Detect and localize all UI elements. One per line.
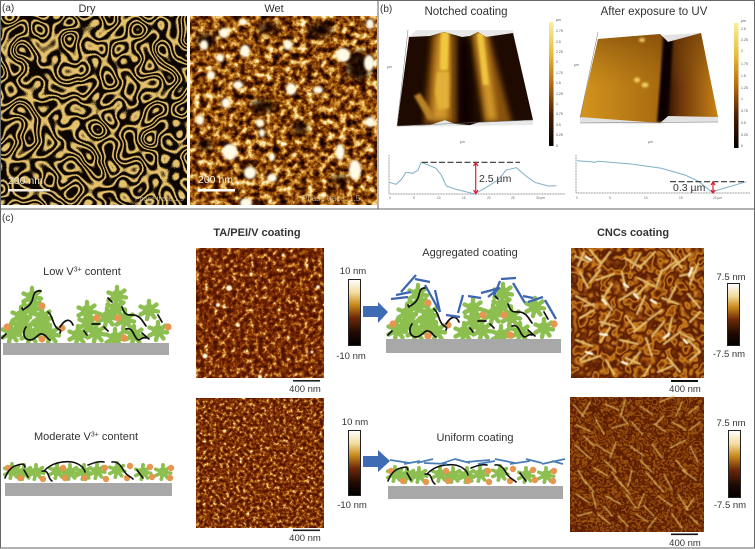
color bar: notched map: 2 — [556, 60, 558, 64]
label: Low V3+ content: Low V — [43, 266, 74, 278]
schematic: uniform coating — [388, 432, 565, 499]
label: Moderate V3+ content: 3+ — [91, 432, 99, 438]
3D AFM map: notched coating — [387, 30, 533, 144]
color bar: UV map: 1 — [741, 97, 743, 101]
color bar: UV map: 0 — [741, 144, 743, 148]
substrate — [388, 486, 563, 499]
profile chart: notched coating: 0 — [389, 196, 391, 200]
heading: Notched coating: Notched coating — [424, 6, 508, 18]
color bar: notched map: 1.5 — [556, 81, 561, 85]
wet scale bar — [198, 176, 235, 192]
color bar: notched map: µm — [556, 18, 561, 22]
scale bar: 400 nm — [669, 384, 701, 395]
scale bar: 400 nm — [669, 538, 701, 549]
profile chart: after UV: 15 — [679, 196, 683, 200]
label: Moderate V3+ content: Moderate V — [34, 431, 91, 443]
color bar: TA/PEI/V top: 10 nm — [340, 266, 366, 277]
profile chart: notched coating — [389, 155, 565, 200]
color bar: UV map — [734, 19, 748, 148]
color bar: CNC top — [713, 272, 746, 360]
color bar: notched map: 2.5 — [556, 40, 561, 44]
AFM image: TA/PEI/V moderate — [196, 398, 324, 544]
panel label (c): (c) — [2, 213, 14, 224]
wet dark patches — [196, 23, 370, 184]
panel: (b) notched coating and UV healed coating — [380, 4, 750, 200]
profile chart: after UV — [576, 155, 750, 200]
color bar: CNC top: -7.5 nm — [713, 349, 745, 360]
color bar: UV map: 2.25 — [741, 38, 748, 42]
color bar: UV map: 1.25 — [741, 86, 748, 90]
color bar: notched map: 1.25 — [556, 92, 563, 96]
color bar: notched map: 0.75 — [556, 112, 563, 116]
AFM image: CNC bottom — [570, 396, 704, 549]
panel label (a): (a) — [2, 3, 14, 14]
substrate — [5, 483, 172, 496]
color bar: UV map: 2 — [741, 49, 743, 53]
schematic: low V3+ content — [2, 266, 172, 355]
heading: TA/PEI/V coating: TA/PEI/V coating — [213, 227, 301, 239]
profile chart: notched coating: 20 — [487, 196, 491, 200]
profile chart: after UV: 0 — [576, 196, 578, 200]
color bar: TA/PEI/V bottom: 10 nm — [342, 417, 368, 428]
label 0.3 µm: 0.3 µm — [673, 182, 706, 194]
arrow: moderate to uniform — [363, 450, 390, 472]
arrow: low to aggregated — [363, 302, 388, 323]
color bar: CNC bottom — [714, 418, 746, 511]
3D AFM map: after UV — [574, 32, 718, 144]
3D AFM map: after UV: µm — [574, 63, 579, 67]
dry phase trace note: Phase trace 1.5 — [135, 196, 184, 203]
heading: After exposure to UV: After exposure to UV — [601, 6, 708, 18]
image: wet AFM phase with bright particles — [190, 16, 377, 208]
profile chart: after UV: 20 µm — [713, 196, 722, 200]
label: Aggregated coating: Aggregated coating — [422, 247, 518, 259]
color bar: notched map: 1 — [556, 102, 558, 106]
profile chart: notched coating: 15 — [462, 196, 466, 200]
CNC rods piled on aggregates — [391, 275, 556, 319]
profile chart: after UV: 5 — [609, 196, 611, 200]
color bar: UV map: µm — [741, 19, 746, 23]
substrate — [3, 343, 169, 355]
color bar: notched map: 0.5 — [556, 123, 561, 127]
color bar: UV map: 0.5 — [741, 121, 746, 125]
red double arrow 0.3 µm — [711, 182, 715, 193]
color bar: notched map: 2.75 — [556, 29, 563, 33]
heading: Wet: Wet — [264, 3, 284, 15]
color bar: notched map: 0 — [556, 144, 558, 148]
color bar: notched map: 2.25 — [556, 50, 563, 54]
label: Low V3+ content: content — [82, 266, 121, 278]
AFM image: TA/PEI/V low — [196, 248, 324, 395]
schematic: aggregated coating — [386, 247, 561, 353]
color bar: CNC top: 7.5 nm — [716, 272, 746, 283]
color bar: TA/PEI/V top — [336, 266, 366, 362]
label: Moderate V3+ content: content — [99, 431, 138, 443]
schematic: moderate V3+ content — [5, 431, 174, 496]
color bar: TA/PEI/V top: -10 nm — [336, 351, 366, 362]
heading: Dry: Dry — [78, 3, 96, 15]
profile chart: after UV: 10 — [644, 196, 648, 200]
panel: (a) dry and wet phase images — [1, 3, 377, 208]
profile chart: notched coating: 5 — [413, 196, 415, 200]
label: Low V3+ content: 3+ — [74, 266, 82, 274]
profile chart: notched coating: 25 — [511, 196, 515, 200]
panel label (b): (b) — [380, 4, 392, 15]
dry scale bar — [8, 175, 50, 192]
wet phase trace note: Phase trace: 1.5 — [302, 194, 361, 203]
color bar: notched map: 0.25 — [556, 133, 563, 137]
color bar: UV map: 1.75 — [741, 62, 748, 66]
image: dry labyrinth AFM phase — [1, 16, 187, 205]
3D AFM map: notched coating: µm — [460, 140, 465, 144]
color bar: UV map: 2.5 — [741, 27, 746, 31]
map 2 bright spots — [634, 38, 648, 88]
dry scale bar: 200 nm — [8, 175, 43, 187]
color bar: notched map: 1.75 — [556, 71, 563, 75]
label: Uniform coating: Uniform coating — [436, 432, 514, 444]
color bar: notched map — [549, 18, 563, 148]
color bar: TA/PEI/V bottom — [337, 417, 368, 511]
wet bright particles — [196, 19, 375, 208]
scale bar: 400 nm — [289, 533, 321, 544]
color bar: CNC bottom: -7.5 nm — [714, 500, 746, 511]
CNC rods in flat layer — [390, 459, 565, 464]
red double arrow 2.5 µm — [474, 162, 478, 194]
profile chart: notched coating: 10 — [437, 196, 441, 200]
label 2.5 µm: 2.5 µm — [479, 173, 512, 185]
wet scale bar: 200 nm — [198, 174, 233, 186]
color bar: UV map: 0.75 — [741, 109, 748, 113]
substrate — [386, 339, 561, 353]
panel: (c) coatings — [2, 213, 746, 549]
color bar: UV map: 1.5 — [741, 74, 746, 78]
color bar: UV map: 0.25 — [741, 133, 748, 137]
color bar: TA/PEI/V bottom: -10 nm — [337, 500, 367, 511]
heading: CNCs coating: CNCs coating — [597, 227, 669, 239]
scale bar: 400 nm — [289, 384, 321, 395]
color bar: CNC bottom: 7.5 nm — [716, 418, 746, 429]
AFM image: CNC top — [571, 248, 704, 395]
3D AFM map: notched coating: µm — [387, 65, 392, 69]
map 1 axis ticks — [397, 30, 533, 126]
3D AFM map: after UV: µm — [648, 140, 653, 144]
profile chart: notched coating: 30 µm — [536, 196, 545, 200]
